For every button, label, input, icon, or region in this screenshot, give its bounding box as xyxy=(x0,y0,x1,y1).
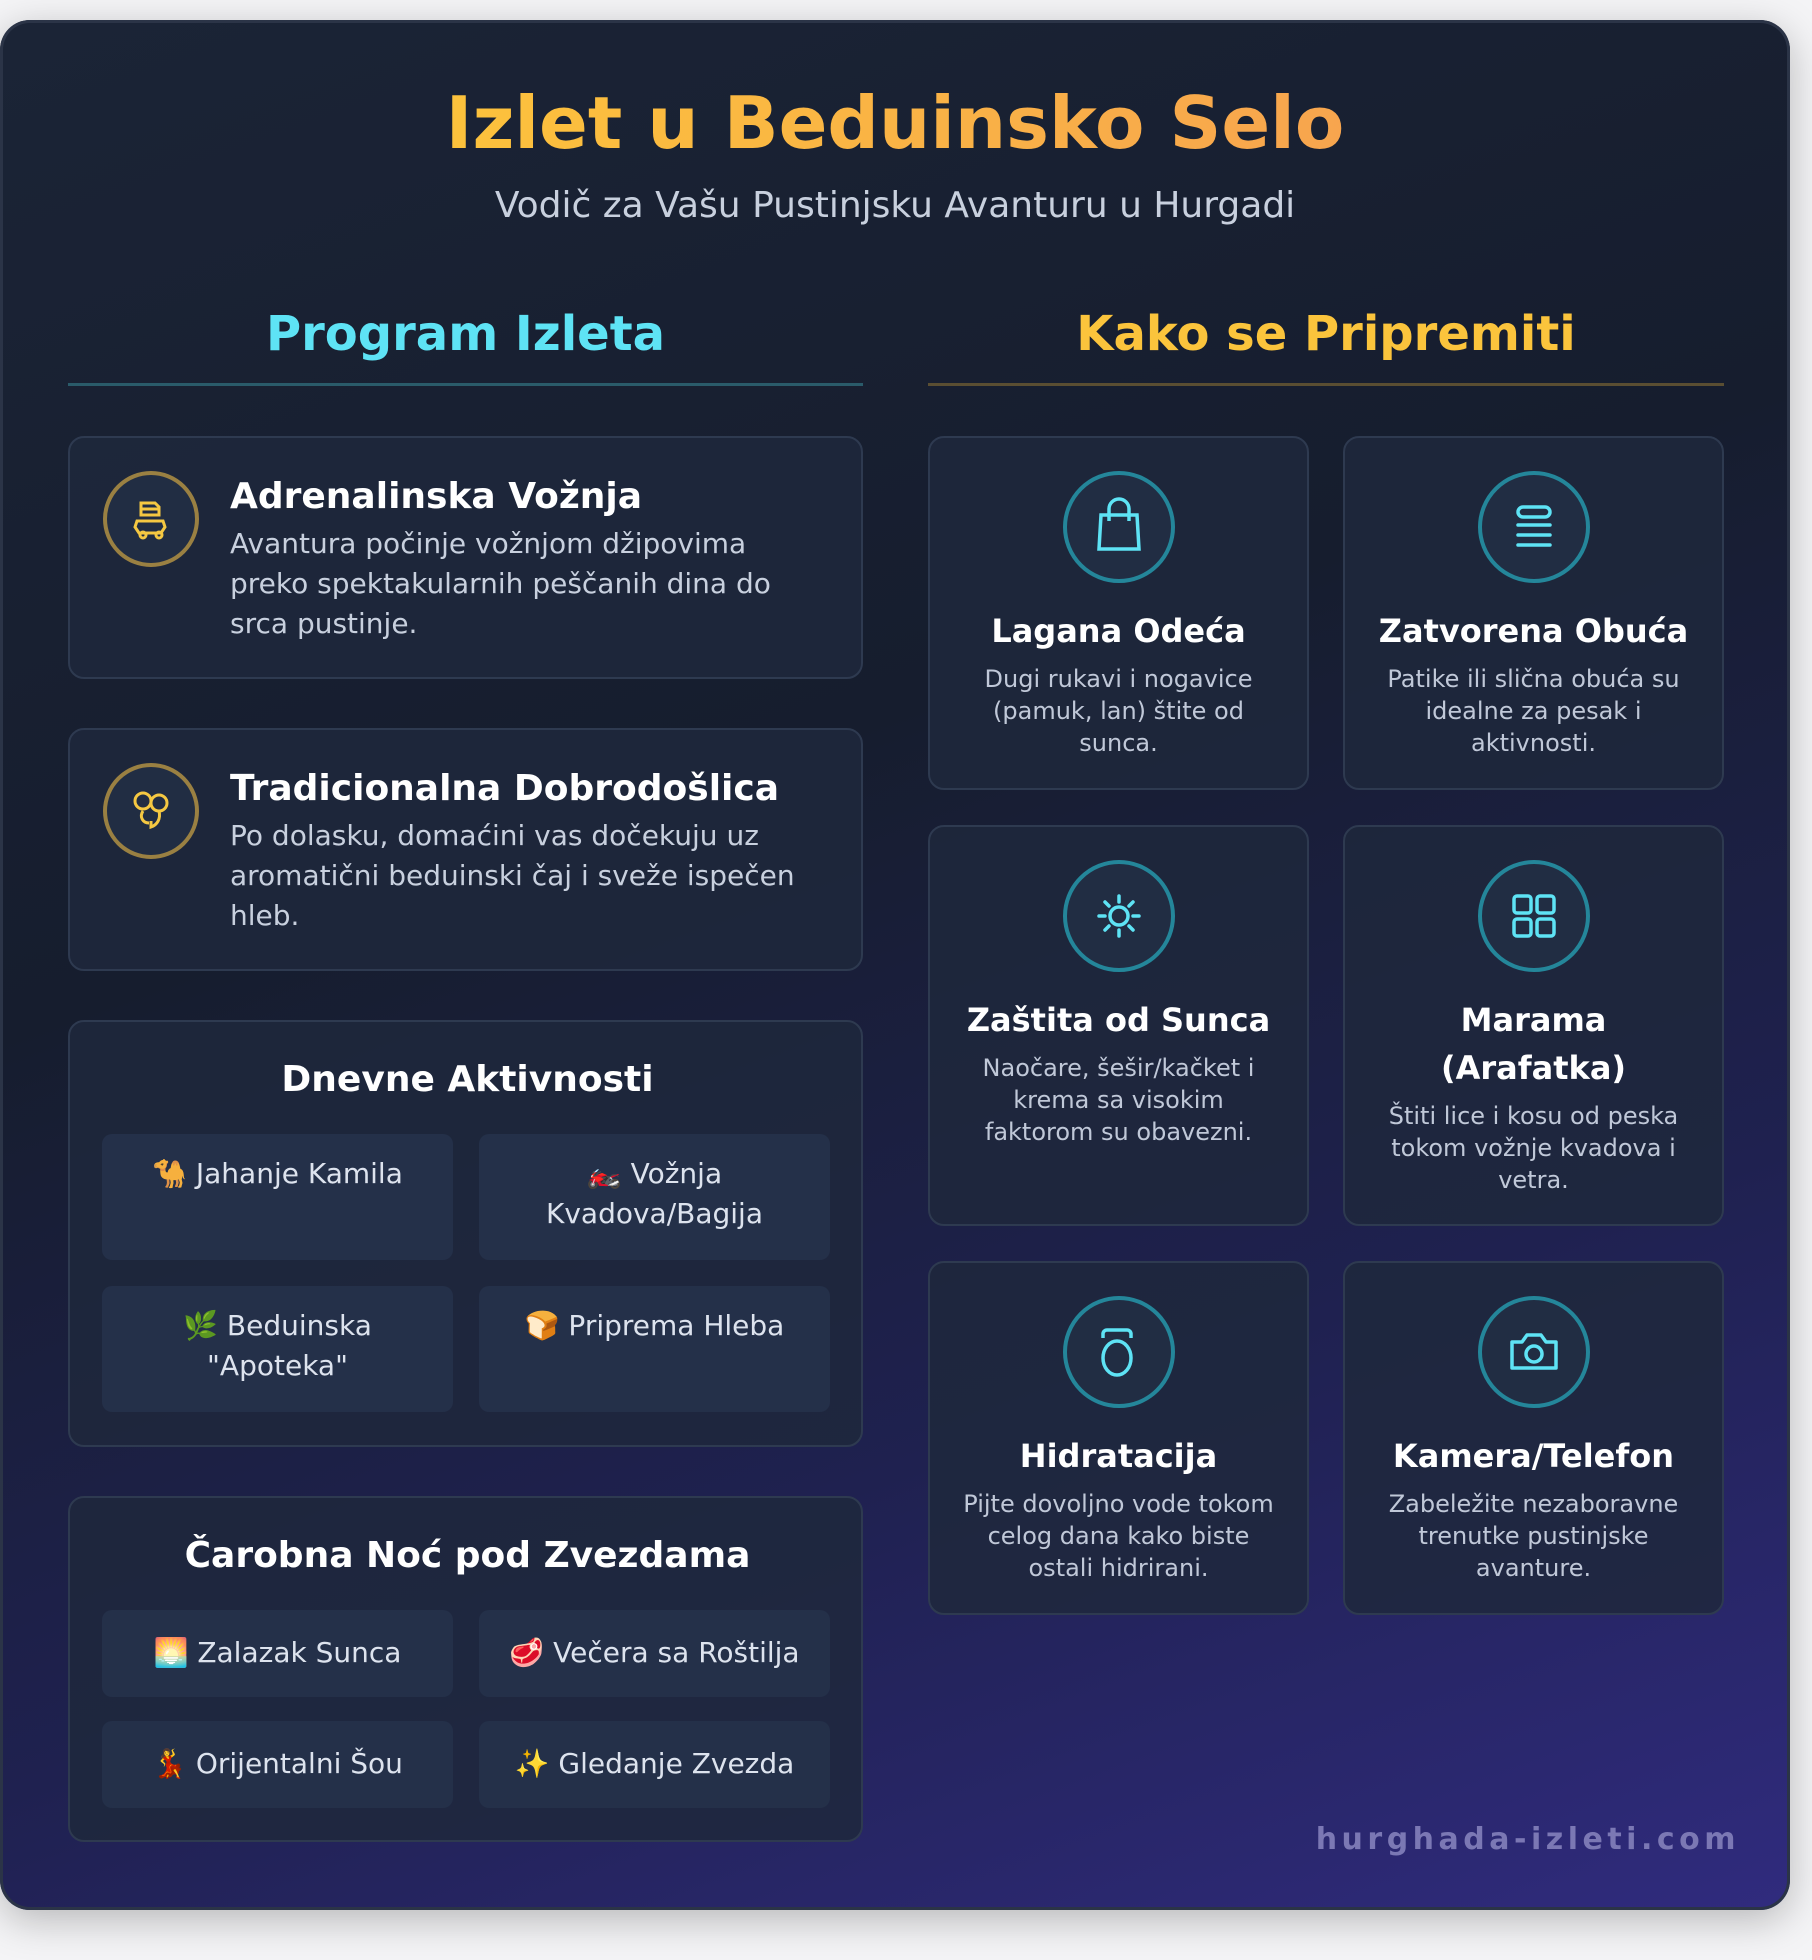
tile xyxy=(479,1134,830,1260)
card: zatvorena obuca xyxy=(1343,436,1724,790)
card: hidratacija xyxy=(928,1261,1309,1615)
tile xyxy=(479,1721,830,1808)
icon: jeep xyxy=(103,471,199,567)
text: Avantura počinje vožnjom džipovima preko spektakularnih peščanih dina do srca pustinje. xyxy=(230,527,771,640)
icon: bottle xyxy=(1063,1296,1175,1408)
card: adrenalinska voznja xyxy=(68,436,863,679)
tile xyxy=(102,1134,453,1260)
title: Kamera/Telefon xyxy=(1393,1437,1674,1475)
icon: grid xyxy=(1478,860,1590,972)
panel: dnevne aktivnosti xyxy=(68,1020,863,1447)
text: Dugi rukavi i nogavice (pamuk, lan) štite od sunca. xyxy=(985,665,1252,757)
text: Štiti lice i kosu od peska tokom vožnje kvadova i vetra. xyxy=(1389,1102,1678,1194)
tile: "Apoteka" xyxy=(207,1349,348,1382)
title: Zatvorena Obuća xyxy=(1379,612,1688,650)
icon: lines xyxy=(1478,471,1590,583)
title: Lagana Odeća xyxy=(991,612,1246,650)
tile: 🐪 Jahanje Kamila xyxy=(152,1157,403,1190)
card: kamera xyxy=(1343,1261,1724,1615)
tile: 💃 Orijentalni Šou xyxy=(152,1747,403,1780)
text: Pijte dovoljno vode tokom celog dana kako biste ostali hidrirani. xyxy=(963,1490,1274,1582)
card: zastita od sunca xyxy=(928,825,1309,1226)
heading: Čarobna Noć pod Zvezdama xyxy=(185,1535,750,1576)
subtitle: Vodič za Vašu Pustinjsku Avanturu u Hurgadi xyxy=(495,185,1295,226)
title: Tradicionalna Dobrodošlica xyxy=(230,768,779,809)
title: Hidratacija xyxy=(1020,1437,1217,1475)
title: (Arafatka) xyxy=(1441,1049,1626,1087)
text: Naočare, šešir/kačket i krema sa visokim faktorom su obavezni. xyxy=(983,1054,1254,1146)
tile: ✨ Gledanje Zvezda xyxy=(515,1747,794,1780)
title: Adrenalinska Vožnja xyxy=(230,476,642,517)
icon: bag xyxy=(1063,471,1175,583)
title: Marama xyxy=(1461,1001,1606,1039)
tile xyxy=(479,1610,830,1697)
tile: Kvadova/Bagija xyxy=(546,1197,763,1230)
icon: sun xyxy=(1063,860,1175,972)
text: Patike ili slična obuća su idealne za pesak i aktivnosti. xyxy=(1387,665,1680,757)
heading: program: Program Izleta xyxy=(266,306,665,362)
card: tradicionalna dobrodoslica xyxy=(68,728,863,971)
tile xyxy=(102,1721,453,1808)
card: lagana odeca xyxy=(928,436,1309,790)
title xyxy=(1441,1001,1626,1087)
tile: 🌿 Beduinska xyxy=(183,1309,372,1342)
heading: prepare: Kako se Pripremiti xyxy=(1076,306,1576,362)
heading: Dnevne Aktivnosti xyxy=(281,1059,654,1100)
text: Zabeležite nezaboravne trenutke pustinjske avanture. xyxy=(1389,1490,1678,1582)
tile: 🏍️ Vožnja xyxy=(587,1157,722,1190)
text: Po dolasku, domaćini vas dočekuju uz aromatični beduinski čaj i sveže ispečen hleb. xyxy=(230,819,795,932)
tile: 🥩 Večera sa Roštilja xyxy=(509,1636,800,1669)
tile xyxy=(479,1286,830,1412)
title: Zaštita od Sunca xyxy=(967,1001,1270,1039)
tile: 🌅 Zalazak Sunca xyxy=(154,1636,401,1669)
card: marama xyxy=(1343,825,1724,1226)
panel: carobna noc xyxy=(68,1496,863,1842)
tile: 🍞 Priprema Hleba xyxy=(525,1309,784,1342)
tile xyxy=(102,1610,453,1697)
tile xyxy=(102,1286,453,1412)
icon: camera xyxy=(1478,1296,1590,1408)
footer: website: hurghada-izleti.com xyxy=(1316,1822,1740,1857)
title: Izlet u Beduinsko Selo xyxy=(446,81,1344,165)
icon: tea xyxy=(103,763,199,859)
